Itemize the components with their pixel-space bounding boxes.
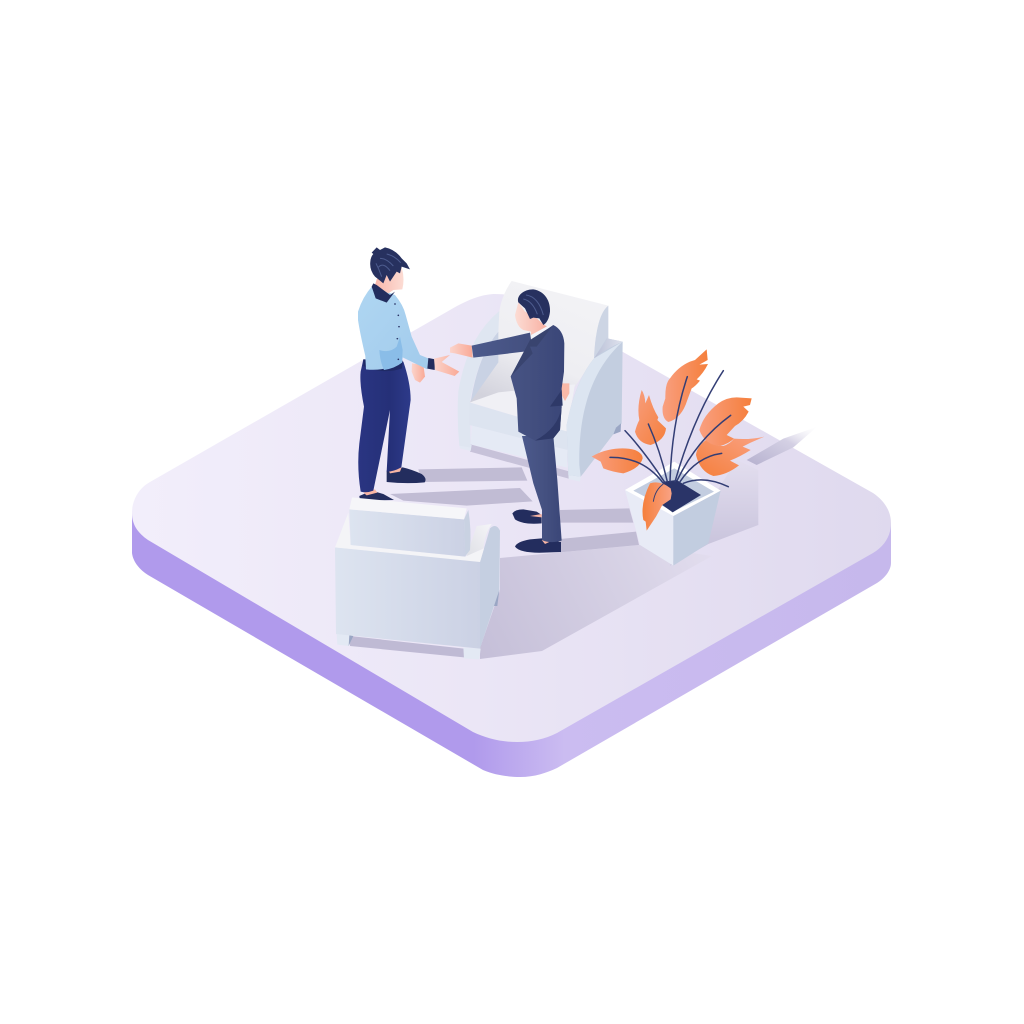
pot rim: [625, 462, 721, 516]
hair: [518, 289, 550, 325]
feet: [337, 633, 353, 646]
shadow: large floor shadow of front armchair: [480, 545, 712, 659]
platform top surface: [132, 294, 891, 742]
right arm side: [567, 338, 623, 477]
collar: [372, 283, 395, 303]
neck and face: [515, 302, 547, 336]
chair back side: [594, 306, 608, 358]
leaf: front: [642, 482, 672, 531]
arm top: [467, 524, 492, 556]
hair: [370, 247, 410, 283]
shoes: [387, 467, 426, 483]
hand: outstretched: [450, 343, 473, 358]
floor shadows: [390, 427, 817, 659]
chair feet: [459, 443, 581, 482]
person: man in dark suit: [450, 289, 569, 553]
cushion face: [349, 509, 465, 557]
seat cushion: [470, 384, 575, 432]
trousers: [358, 359, 411, 492]
hand: hanging: [412, 363, 425, 383]
armchair: back chair: [458, 281, 623, 482]
left arm inner: [471, 332, 498, 402]
chair side: [480, 526, 500, 648]
chair back panel: [470, 281, 608, 402]
neck and face: [375, 267, 404, 293]
cushion side: [464, 510, 471, 557]
pot right face: [673, 491, 721, 566]
armchair: front chair: [335, 497, 500, 659]
pot interior: [633, 468, 714, 512]
stems: [610, 371, 731, 487]
leaf: left: [592, 448, 643, 473]
pot left face: [625, 490, 673, 566]
chair under shadow: [350, 636, 464, 657]
cuff: [427, 358, 435, 370]
jacket shade: [535, 390, 563, 441]
seat front: [469, 402, 567, 450]
hand: behind back: [560, 383, 569, 401]
jacket: [472, 325, 564, 441]
shadow: plant wall shadow: [670, 427, 817, 566]
side notch: [493, 589, 499, 606]
left arm: [458, 311, 499, 448]
belt: [363, 359, 403, 371]
chair under shadow: [470, 444, 570, 479]
chair base: [471, 426, 567, 468]
right arm top: [594, 338, 623, 358]
leaf: left upper: [635, 390, 666, 445]
platform base side: [132, 513, 891, 777]
shirt buttons: [394, 303, 400, 360]
shirt shade: [379, 337, 403, 370]
lapel: [511, 325, 553, 377]
upper body: [450, 289, 569, 441]
hand: reaching: [434, 355, 459, 376]
soil: [660, 480, 701, 512]
chair notch: [613, 423, 621, 434]
trousers and shoes: [512, 436, 562, 553]
cushion top: [349, 497, 467, 519]
shadow: stripes behind the figures: [390, 467, 639, 552]
shirt collar: [531, 326, 551, 344]
leaf: top: [663, 349, 708, 422]
chair front: [335, 547, 480, 649]
plant in pot: [592, 349, 764, 566]
leaf: right lower: [696, 437, 764, 476]
person: man in light blue shirt: [358, 247, 459, 501]
shirt: [358, 286, 428, 370]
chair top ledge: [335, 513, 484, 562]
leaf: right upper: [699, 397, 752, 446]
right arm front: [567, 342, 623, 477]
